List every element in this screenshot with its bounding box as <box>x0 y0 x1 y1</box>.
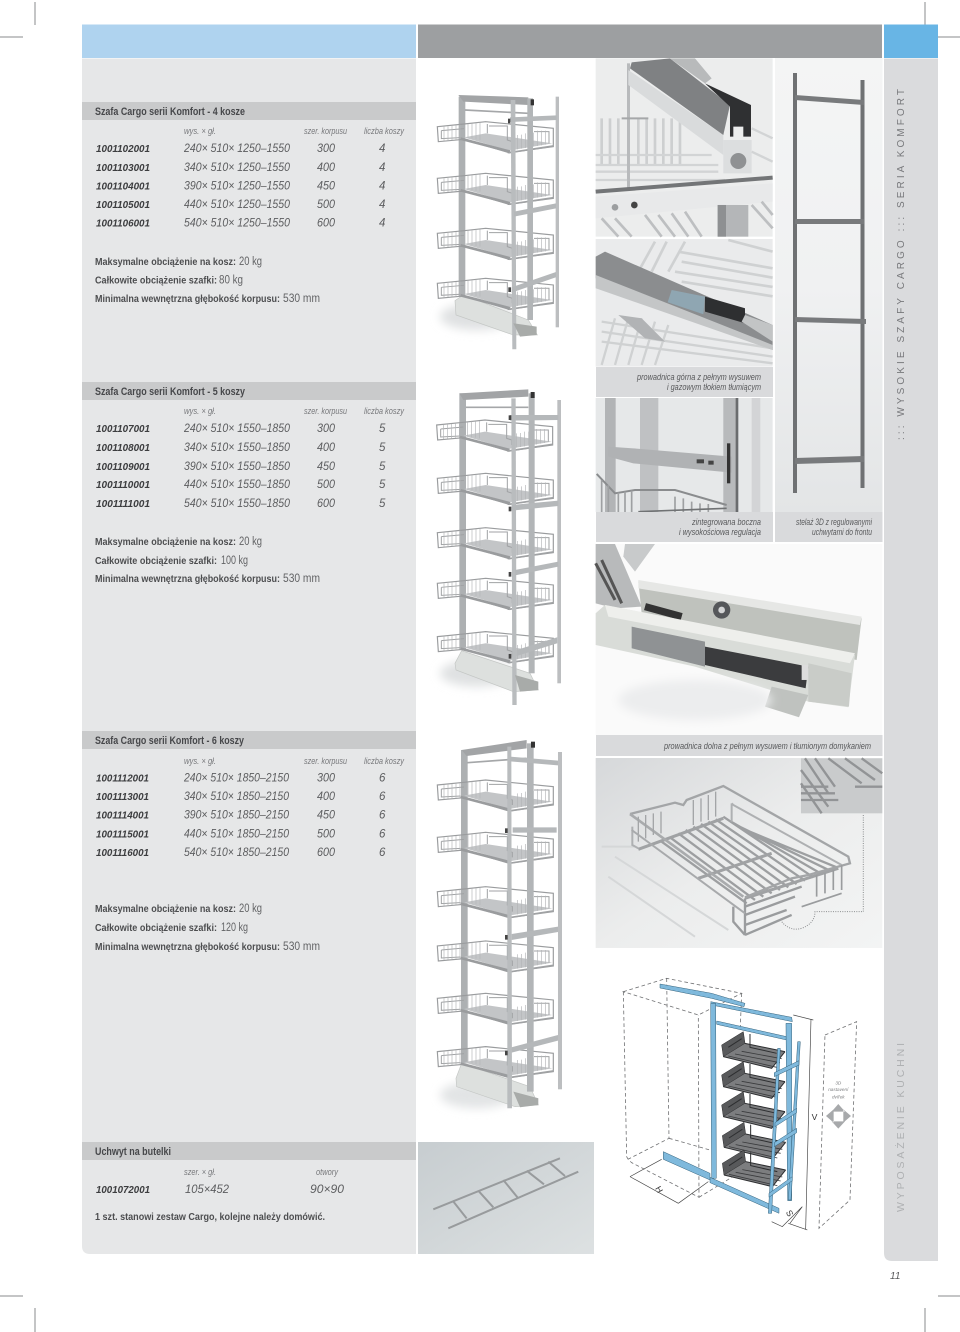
table: 6 baskets: 6 <box>379 772 386 784</box>
table: 6 baskets: Maksymalne obciążenie na kosz: <box>95 903 236 915</box>
table: 4 baskets <box>82 102 416 305</box>
diagram: cabinet installation: S <box>784 1208 796 1219</box>
table: 6 baskets: 6 <box>379 847 386 859</box>
sidebar label: series: ::: WYSOKIE SZAFY CARGO ::: SERIA KOMFORT <box>896 89 907 440</box>
table: 6 baskets: 300 <box>317 772 336 784</box>
table: 4 baskets: 450 <box>317 180 336 192</box>
table: bottle holder: otwory <box>316 1167 338 1177</box>
table: 5 baskets: Minimalna wewnętrzna głębokość korpusu: <box>95 573 280 585</box>
table: 4 baskets: 240× 510× 1250–1550 <box>183 143 291 155</box>
table: 5 baskets: 500 <box>317 479 336 491</box>
photo: 5 basket cabinet <box>437 389 561 705</box>
diagram: cabinet installation: H <box>653 1184 665 1195</box>
caption: side adjustment <box>596 512 773 542</box>
table: 6 baskets: Całkowite obciążenie szafki: <box>95 922 217 934</box>
panel: sidebar <box>884 58 938 1261</box>
table: 5 baskets: 400 <box>317 442 336 454</box>
table: 6 baskets: 390× 510× 1850–2150 <box>184 810 290 822</box>
table: 5 baskets: 5 <box>379 461 386 473</box>
table: 4 baskets: 1001103001 <box>96 162 150 174</box>
table: 6 baskets <box>82 731 416 953</box>
table: 4 baskets: 1001105001 <box>96 199 150 211</box>
table: 4 baskets: 390× 510× 1250–1550 <box>184 180 291 192</box>
table: 4 baskets: 4 <box>379 162 385 174</box>
table: 4 baskets: liczba koszy <box>364 126 404 136</box>
table: bottle holder: Uchwyt na butelki <box>95 1146 171 1158</box>
table: 4 baskets: 1001106001 <box>96 218 150 230</box>
table: 4 baskets: 530 mm <box>283 293 320 305</box>
table: bottle holder: 1 szt. stanowi zestaw Cargo, kolejne należy domówić. <box>95 1211 325 1223</box>
photo: side adjustment detail <box>596 398 773 512</box>
photo: bottom rail detail <box>596 544 882 735</box>
table: 5 baskets: 440× 510× 1550–1850 <box>184 479 291 491</box>
table: 4 baskets: 4 <box>379 199 385 211</box>
table: 4 baskets: Całkowite obciążenie szafki: <box>95 274 217 286</box>
door adjustment arrows: 3D <box>835 1080 842 1085</box>
table: 4 baskets: 80 kg <box>219 274 243 286</box>
caption: top rail: i gazowym tłokiem tłumiącym <box>667 382 761 393</box>
table: 5 baskets: 390× 510× 1550–1850 <box>184 461 291 473</box>
caption: 3D frame: uchwytami do frontu <box>812 527 873 538</box>
table: 5 baskets: 100 kg <box>221 555 248 567</box>
top colour bands <box>82 24 938 58</box>
door adjustment arrows <box>826 1080 851 1129</box>
page number: 11 <box>890 1271 900 1282</box>
table: 6 baskets: 530 mm <box>283 941 320 953</box>
baskets <box>722 1032 786 1187</box>
caption: top rail: prowadnica górna z pełnym wysuwem <box>636 372 761 383</box>
table: 6 baskets: 500 <box>317 828 336 840</box>
table: 6 baskets: Szafa Cargo serii Komfort - 6 koszy <box>95 735 244 747</box>
table: 6 baskets: 340× 510× 1850–2150 <box>184 791 290 803</box>
photo: 4 basket cabinet <box>437 95 559 349</box>
table: 4 baskets: Szafa Cargo serii Komfort - 4 kosze <box>95 106 245 118</box>
table: 5 baskets: 450 <box>317 461 336 473</box>
table: 5 baskets: Szafa Cargo serii Komfort - 5 koszy <box>95 386 245 398</box>
table: 4 baskets: 340× 510× 1250–1550 <box>184 162 291 174</box>
table: 4 baskets: 540× 510× 1250–1550 <box>184 218 291 230</box>
caption: top rail <box>596 367 773 397</box>
blue frame <box>660 984 800 1213</box>
table: 6 baskets: 120 kg <box>221 922 248 934</box>
table: 6 baskets: 6 <box>379 810 386 822</box>
table: 5 baskets: Całkowite obciążenie szafki: <box>95 555 217 567</box>
table: 5 baskets: 340× 510× 1550–1850 <box>184 442 291 454</box>
table: 6 baskets: szer. korpusu <box>304 756 347 766</box>
table: 6 baskets: 1001113001 <box>96 791 149 803</box>
table: 6 baskets: 540× 510× 1850–2150 <box>184 847 290 859</box>
table: 4 baskets: 4 <box>379 218 385 230</box>
table: 4 baskets: 4 <box>379 180 385 192</box>
table: 5 baskets: 1001109001 <box>96 461 150 473</box>
table: bottle holder: 105×452 <box>185 1184 230 1196</box>
table: 5 baskets: Maksymalne obciążenie na kosz: <box>95 536 236 548</box>
table: bottle holder <box>82 1142 416 1223</box>
caption: bottom rail: prowadnica dolna z pełnym wysuwem i tłumionym domykaniem <box>663 741 871 752</box>
table: 6 baskets: 240× 510× 1850–2150 <box>183 772 290 784</box>
table: bottle holder: 90×90 <box>310 1184 345 1196</box>
table: 5 baskets: 5 <box>379 479 386 491</box>
photo: wire basket <box>596 758 882 948</box>
table: 4 baskets: 440× 510× 1250–1550 <box>184 199 291 211</box>
diagram: cabinet installation: V <box>812 1112 818 1122</box>
diagram: cabinet installation <box>623 978 857 1230</box>
table: bottle holder: szer. × gł. <box>184 1167 216 1177</box>
photo: 6 basket cabinet <box>437 740 562 1108</box>
table: 6 baskets: 440× 510× 1850–2150 <box>184 828 290 840</box>
table: 5 baskets: 1001111001 <box>96 498 150 510</box>
dashed cabinet outline <box>623 978 857 1228</box>
table: 5 baskets: 1001108001 <box>96 442 150 454</box>
table: 5 baskets: 540× 510× 1550–1850 <box>184 498 291 510</box>
table: 6 baskets: 1001116001 <box>96 847 149 859</box>
table: 4 baskets: Minimalna wewnętrzna głębokość korpusu: <box>95 293 280 305</box>
table: 4 baskets: 1001104001 <box>96 180 150 192</box>
table: 5 baskets: liczba koszy <box>364 406 404 416</box>
panel: specification background <box>82 58 416 1254</box>
table: 6 baskets: 20 kg <box>239 903 262 915</box>
table: 6 baskets: 1001112001 <box>96 772 149 784</box>
table: 4 baskets: 300 <box>317 143 336 155</box>
table: 5 baskets: 300 <box>317 423 336 435</box>
table: bottle holder: 1001072001 <box>96 1184 150 1196</box>
table: 4 baskets: 20 kg <box>239 256 262 268</box>
table: 6 baskets: 6 <box>379 791 386 803</box>
table: 5 baskets: 240× 510× 1550–1850 <box>183 423 291 435</box>
photo: bottle holder <box>418 1142 594 1254</box>
table: 4 baskets: 500 <box>317 199 336 211</box>
table: 6 baskets: 450 <box>317 810 336 822</box>
table: 5 baskets: 1001107001 <box>96 423 150 435</box>
caption: 3D frame <box>775 512 882 542</box>
table: 6 baskets: 400 <box>317 791 336 803</box>
table: 6 baskets: 6 <box>379 828 386 840</box>
table: 5 baskets: 5 <box>379 442 386 454</box>
table: 5 baskets: 600 <box>317 498 336 510</box>
photo: top rail detail <box>596 58 773 237</box>
caption: side adjustment: zintegrowana boczna <box>691 517 761 528</box>
table: 5 baskets: 5 <box>379 498 386 510</box>
door adjustment arrows: dvířek <box>832 1094 845 1099</box>
caption: 3D frame: stelaż 3D z regulowanymi <box>796 517 873 528</box>
table: 6 baskets: 1001114001 <box>96 810 149 822</box>
sidebar label: section: WYPOSAŻENIE KUCHNI <box>894 1043 907 1212</box>
caption: side adjustment: i wysokościowa regulacja <box>679 527 761 538</box>
table: 6 baskets: Minimalna wewnętrzna głębokość korpusu: <box>95 941 280 953</box>
table: 6 baskets: 600 <box>317 847 336 859</box>
door adjustment arrows: nastavení <box>828 1087 849 1092</box>
table: 4 baskets: szer. korpusu <box>304 126 347 136</box>
table: 4 baskets: Maksymalne obciążenie na kosz: <box>95 256 236 268</box>
table: 5 baskets: 1001110001 <box>96 479 150 491</box>
photo: 3D frame <box>775 58 882 512</box>
table: 4 baskets: 4 <box>379 143 385 155</box>
table: 5 baskets: szer. korpusu <box>304 406 347 416</box>
table: 6 baskets: 1001115001 <box>96 828 149 840</box>
caption: bottom rail <box>596 735 882 756</box>
table: 6 baskets: liczba koszy <box>364 756 404 766</box>
table: 5 baskets: 20 kg <box>239 536 262 548</box>
table: 4 baskets: 400 <box>317 162 336 174</box>
table: 5 baskets: 530 mm <box>283 573 320 585</box>
table: 4 baskets: 600 <box>317 218 336 230</box>
table: 5 baskets: 5 <box>379 423 386 435</box>
photo: gas damper detail <box>596 239 773 367</box>
table: 6 baskets: wys. × gł. <box>184 756 216 766</box>
dimension lines <box>630 1015 813 1230</box>
table: 4 baskets: wys. × gł. <box>184 126 216 136</box>
table: 5 baskets <box>82 382 416 585</box>
table: 5 baskets: wys. × gł. <box>184 406 216 416</box>
table: 4 baskets: 1001102001 <box>96 143 150 155</box>
